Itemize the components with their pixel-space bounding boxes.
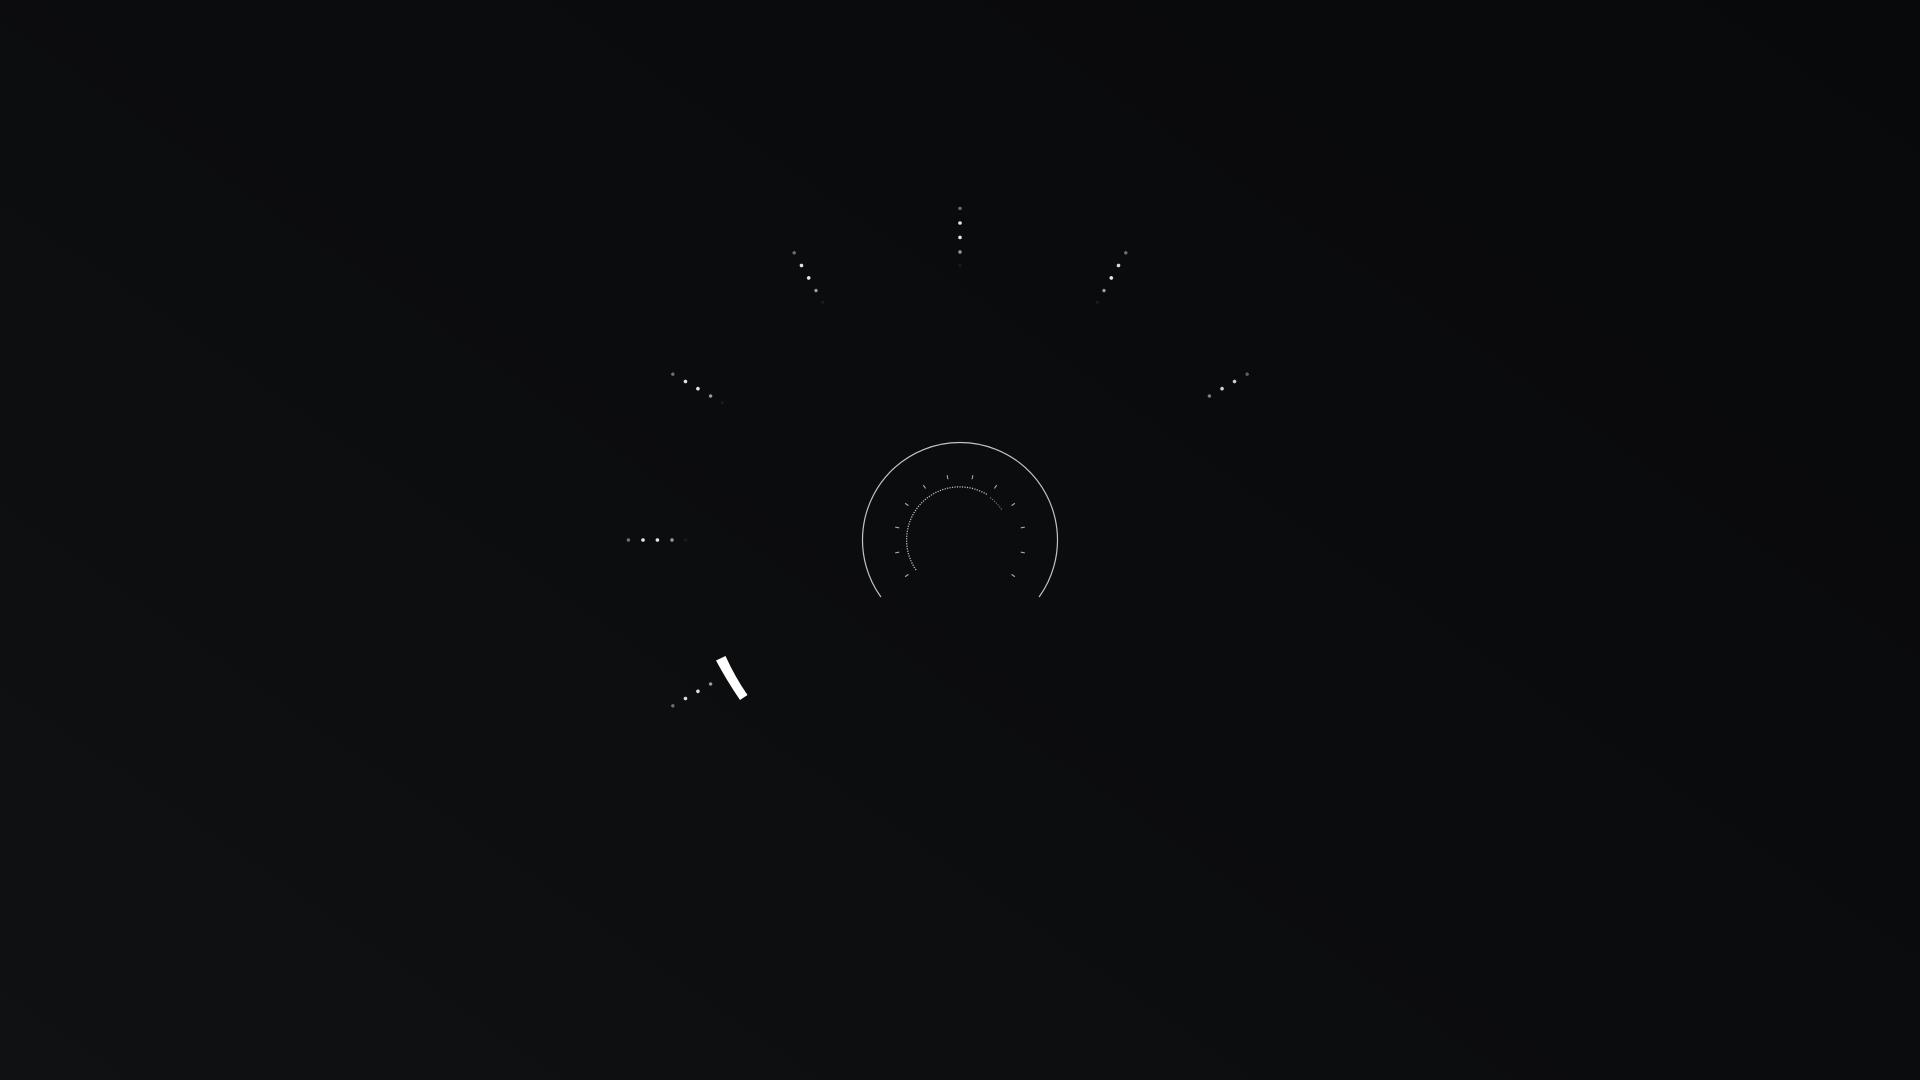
dot ray: top: [958, 207, 962, 267]
dot ray: right upper: [1207, 372, 1250, 398]
radial tick marks: [895, 475, 1025, 577]
white tangential bar: [716, 656, 748, 700]
dot ray: left: [627, 538, 687, 542]
outer ring arc: [863, 442, 1058, 597]
inner dotted arc: [907, 487, 1002, 570]
dot ray: upper left near top: [792, 250, 825, 305]
dot ray: left upper: [670, 372, 725, 405]
dot ray: lower left: [670, 682, 713, 708]
dot ray: upper right near top: [1095, 250, 1128, 305]
